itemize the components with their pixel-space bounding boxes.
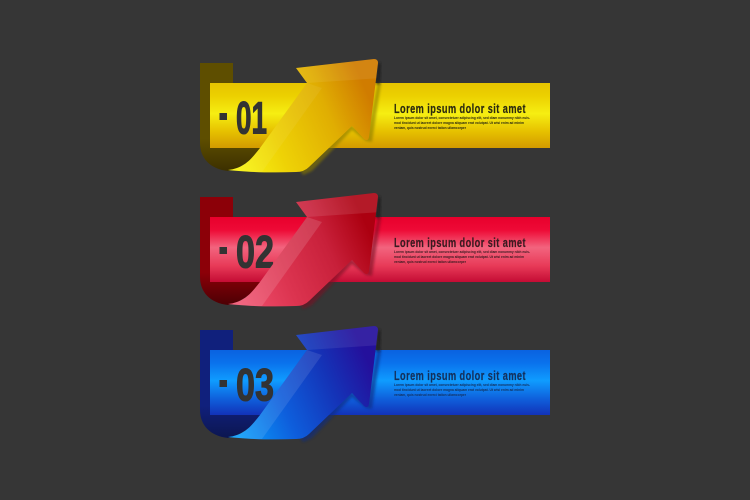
text block 01 — [394, 102, 531, 130]
text block 02: veniam, quis nostrud exerci tation ullamcorper — [394, 259, 466, 264]
band 03 — [210, 350, 550, 415]
panel: step 01 yellow — [200, 56, 550, 175]
number 03: 03 — [236, 360, 274, 410]
text block 02: mod tincidunt ut laoreet dolore magna aliquam erat volutpat. Ut wisi enim ad minim — [394, 254, 524, 259]
panel: step 03 blue — [200, 323, 550, 442]
number 01 — [220, 92, 267, 144]
text block 03: veniam, quis nostrud exerci tation ullamcorper — [394, 392, 466, 397]
band 01 — [210, 83, 550, 148]
number 03 — [220, 360, 274, 410]
number 01: 01 — [236, 92, 267, 144]
text block 03: Lorem ipsum dolor sit amet — [394, 369, 526, 383]
back tab 03 — [200, 330, 262, 438]
text block 02 — [394, 236, 531, 264]
text block 01: veniam, quis nostrud exerci tation ullamcorper — [394, 125, 466, 130]
back tab 01 — [200, 63, 262, 171]
text block 02: Lorem ipsum dolor sit amet, consectetuer adipiscing elit, sed diam nonummy nibh euis- — [394, 249, 531, 254]
back tab 02 — [200, 197, 262, 305]
band 02 — [210, 217, 550, 282]
arrow 03 — [228, 323, 382, 442]
panel: step 02 red — [200, 190, 550, 309]
arrow 02 — [228, 190, 382, 309]
text block 01: Lorem ipsum dolor sit amet — [394, 102, 526, 116]
text block 02: Lorem ipsum dolor sit amet — [394, 236, 526, 250]
text block 01: mod tincidunt ut laoreet dolore magna aliquam erat volutpat. Ut wisi enim ad minim — [394, 120, 524, 125]
arrow 01 — [228, 56, 382, 175]
text block 03 — [394, 369, 531, 397]
text block 03: mod tincidunt ut laoreet dolore magna aliquam erat volutpat. Ut wisi enim ad minim — [394, 387, 524, 392]
number 02 — [220, 226, 274, 278]
text block 01: Lorem ipsum dolor sit amet, consectetuer adipiscing elit, sed diam nonummy nibh euis- — [394, 115, 531, 120]
text block 03: Lorem ipsum dolor sit amet, consectetuer adipiscing elit, sed diam nonummy nibh euis- — [394, 382, 531, 387]
number 02: 02 — [236, 226, 274, 278]
